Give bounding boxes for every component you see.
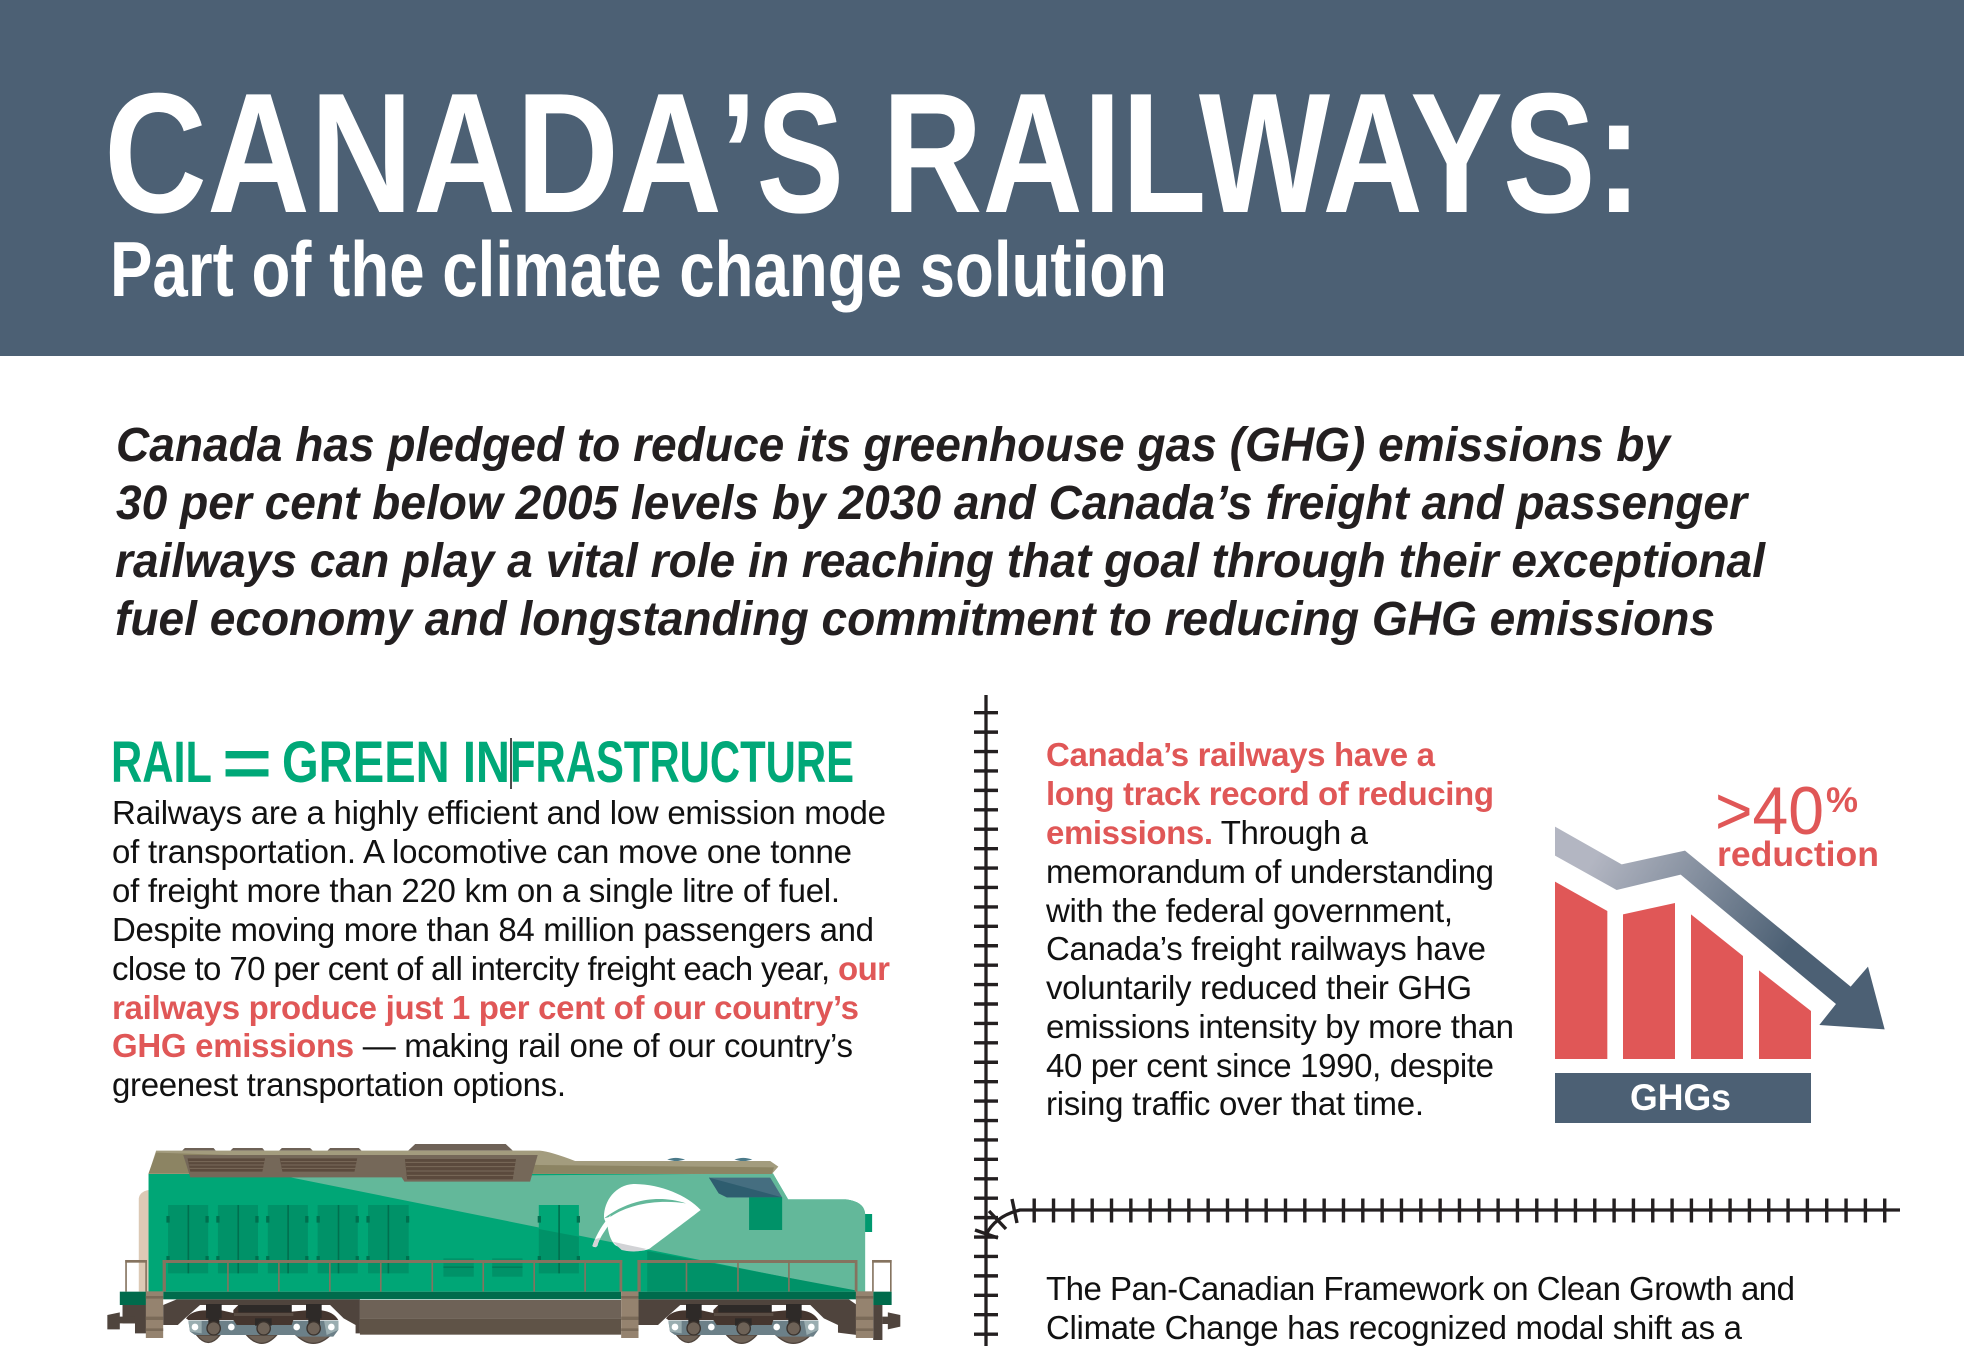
text block: track record: emissions. Through a — [1046, 814, 1369, 851]
rear wheel truck — [666, 1304, 818, 1343]
text block: rail efficiency: Railways are a highly efficient and low emission mode — [112, 794, 886, 831]
GHGs label: GHGs — [1630, 1077, 1731, 1118]
heading: rail equals green infrastructure: = — [222, 725, 272, 801]
hand rails — [125, 1260, 892, 1292]
heading: rail equals green infrastructure: FRASTRUCTURE — [510, 730, 854, 795]
red bars — [1555, 882, 1811, 1059]
heading: rail equals green infrastructure: RAIL — [111, 730, 212, 795]
text block: track record: rising traffic over that time. — [1046, 1085, 1424, 1122]
reduction callout — [1715, 773, 1879, 874]
reduction callout: >40 — [1715, 773, 1824, 849]
under frame and fuel tank — [123, 1299, 882, 1340]
reduction callout: reduction — [1717, 835, 1879, 874]
title: RAILWAYS: — [882, 58, 1642, 249]
text block: Pan-Canadian Framework: Climate Change has recognized modal shift as a — [1046, 1309, 1743, 1346]
text block: track record: memorandum of understanding — [1046, 853, 1494, 890]
chart: GHG reduction — [1555, 773, 1885, 1123]
intro statement: railways can play a vital role in reaching that goal through their exceptional — [115, 535, 1767, 588]
text block: rail efficiency: railways produce just 1 per cent of our country’s — [112, 989, 859, 1026]
text block: track record: with the federal government, — [1045, 892, 1453, 929]
text block: Pan-Canadian Framework — [1046, 1270, 1795, 1346]
reduction callout: % — [1826, 781, 1858, 820]
deck — [120, 1292, 892, 1305]
intro statement: Canada has pledged to reduce its greenhouse gas (GHG) emissions by — [116, 419, 1672, 472]
illustration: green locomotive — [107, 1144, 900, 1343]
text block: track record: emissions intensity by more than — [1046, 1008, 1514, 1045]
front wheel truck — [186, 1304, 338, 1343]
intro statement: fuel economy and longstanding commitment to reducing GHG emissions — [115, 593, 1715, 646]
text block: Pan-Canadian Framework: The Pan-Canadian Framework on Clean Growth and — [1046, 1270, 1795, 1307]
intro statement — [115, 419, 1767, 646]
intro statement: 30 per cent below 2005 levels by 2030 and Canada’s freight and passenger — [116, 477, 1749, 530]
text block: track record: voluntarily reduced their GHG — [1046, 969, 1472, 1006]
downward arrow — [1555, 827, 1885, 1029]
text block: rail efficiency: GHG emissions — making rail one of our country’s — [112, 1027, 853, 1064]
text block: track record — [1045, 736, 1514, 1122]
text block: rail efficiency: Despite moving more than 84 million passengers and — [112, 911, 874, 948]
text block: rail efficiency — [112, 794, 890, 1103]
header banner — [0, 0, 1964, 356]
ladders — [146, 1291, 873, 1338]
text block: rail efficiency: of freight more than 220 km on a single litre of fuel. — [112, 872, 840, 909]
door panels — [166, 1205, 580, 1277]
title: CANADA — [104, 58, 722, 249]
couplers — [107, 1312, 900, 1329]
roof vents — [183, 1155, 538, 1182]
text block: track record: 40 per cent since 1990, despite — [1046, 1047, 1494, 1084]
text block: rail efficiency: of transportation. A locomotive can move one tonne — [112, 833, 852, 870]
title: ’S — [720, 58, 844, 249]
title — [104, 58, 1642, 249]
cab window — [667, 1158, 872, 1232]
locomotive body — [139, 1173, 865, 1292]
roof — [149, 1144, 778, 1174]
icon: white leaf — [592, 1184, 701, 1251]
heading: rail equals green infrastructure — [111, 725, 854, 801]
text block: track record: Canada’s freight railways have — [1046, 930, 1486, 967]
text block: rail efficiency: greenest transportation options. — [112, 1066, 566, 1103]
text block: track record: long track record of reducing — [1046, 775, 1494, 812]
text block: rail efficiency: close to 70 per cent of all intercity freight each year, our — [112, 950, 890, 987]
railway track divider — [975, 695, 1900, 1346]
heading: rail equals green infrastructure: GREEN IN — [282, 730, 510, 795]
text block: track record: Canada’s railways have a — [1046, 736, 1436, 773]
GHGs label — [1555, 1073, 1811, 1123]
subtitle: Part of the climate change solution — [110, 225, 1167, 313]
